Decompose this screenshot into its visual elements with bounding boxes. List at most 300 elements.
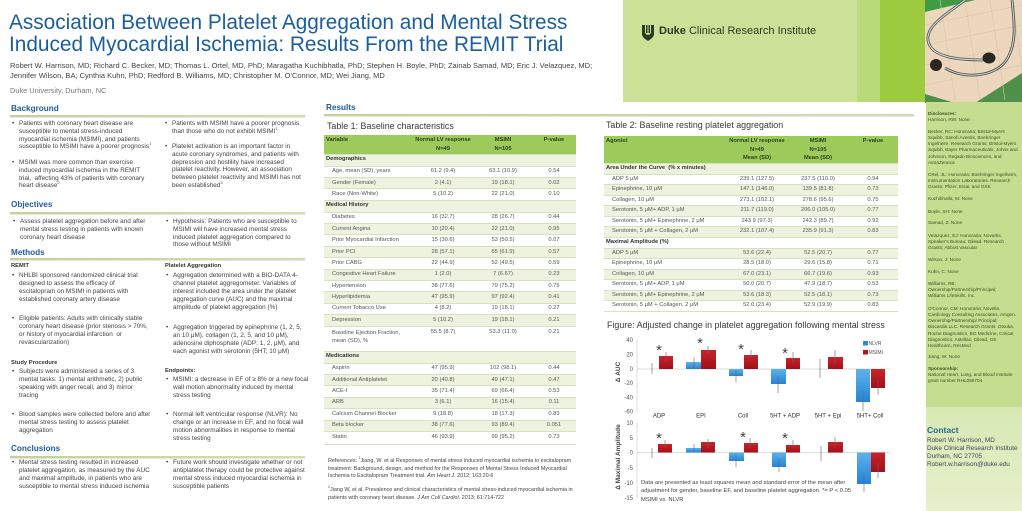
table 2: baseline resting platelet aggregation: Serotonin, 5 μM+ ADP, 1 μM	[612, 207, 685, 213]
table 1: baseline characteristics: Age, mean (SD), years	[332, 168, 390, 174]
table 1: baseline characteristics: 28 (57.1)	[431, 249, 454, 255]
bullet text: susceptible to mental stress-induced	[19, 128, 122, 135]
bullet text: an 10 μM), collagen (1, 2, 5, and 10 μM),	[173, 332, 289, 339]
disclosures text: Williams, RB:	[928, 281, 956, 286]
table 1: baseline characteristics: N=105	[494, 146, 512, 152]
y axis: AUC: 20	[626, 352, 634, 358]
bullet text: Subjects were administered a series of 3	[19, 368, 134, 375]
table 1: baseline characteristics: 0.44	[548, 214, 560, 220]
table 1: baseline characteristics: 102 (98.1)	[490, 365, 516, 371]
bars: MSIMI	[659, 350, 885, 388]
table 1: baseline characteristics: 19 (18.1)	[491, 180, 514, 186]
disclosures text: Becker, RC: Honoraria; Bristol-Myers	[928, 129, 1005, 134]
y axis: maximal amplitude: 5	[630, 436, 634, 442]
table 2: baseline resting platelet aggregation: 52.5 (18.1)	[804, 292, 832, 298]
table 1: baseline characteristics: Baseline Ejection Fraction,	[332, 330, 400, 336]
bullet text: Normal left ventricular response (NLVR): No	[173, 411, 298, 418]
table 1: baseline characteristics: 0.11	[549, 399, 559, 405]
bullet text: adenosine diphosphate (ADP; 1, 2, μM), and	[173, 340, 299, 347]
table 2: baseline resting platelet aggregation: 0.53	[867, 281, 879, 287]
bullet text: revascularization)	[19, 339, 69, 346]
panel: methods	[10, 248, 308, 442]
table 1 title: Table 1: Baseline characteristics	[327, 121, 454, 131]
disclosures text: Jiang, W: None	[928, 354, 960, 359]
table 1: baseline characteristics	[324, 135, 576, 445]
table 2: baseline resting platelet aggregation: 235.9 (91.3)	[802, 228, 834, 234]
table 2: baseline resting platelet aggregation: 0.93	[867, 271, 879, 277]
table 2: baseline resting platelet aggregation: 239.1 (127.5)	[740, 176, 774, 182]
heading: contact: Contact	[927, 425, 959, 435]
table 2: baseline resting platelet aggregation: 0.83	[867, 228, 879, 234]
contact details: Durham, NC 27705	[927, 453, 982, 460]
panel: background	[10, 104, 306, 189]
table 2: baseline resting platelet aggregation: 0.92	[867, 218, 879, 224]
bullet text: speaking with anger recall, and 3) mirror	[19, 384, 133, 391]
heading: methods: Methods	[11, 248, 45, 257]
table 2: baseline resting platelet aggregation: Epinephrine, 10 μM	[612, 260, 662, 266]
table 2: baseline resting platelet aggregation	[604, 136, 898, 312]
bullet text: each agonist with serotonin (5HT; 10 μM)	[173, 348, 289, 355]
legend: NLVR	[868, 341, 882, 347]
references: treatment: Background, design, and method for the Responses of Mental Stress Induced Myocardial	[328, 466, 567, 472]
bullet text: aggregation	[19, 427, 53, 434]
bullet text: antiplatelet therapy could be protective against	[173, 467, 305, 474]
y axis: maximal amplitude: -5	[628, 466, 634, 472]
table 2: baseline resting platelet aggregation: ADP 5 μM	[612, 176, 638, 182]
bullet text: heart disease2	[19, 180, 60, 189]
contact details: Robert W. Harrison, MD	[927, 437, 995, 444]
bullet text: susceptible to MSIMI have a poorer prognosis1	[19, 141, 151, 150]
bullet text: aggregation curve (AUC) and the maximal	[173, 296, 292, 303]
bullet text: platelet aggregation, as measured by the AUC	[19, 467, 150, 474]
bullet text: change or an increase in EF, and no focal wall	[173, 419, 303, 426]
bullet text: induced platelet aggregation compared to	[173, 234, 291, 241]
significance markers	[656, 335, 788, 362]
table 1: baseline characteristics: Aspirin	[332, 365, 350, 371]
text: •	[166, 376, 168, 383]
bullet text: MSIMI: a decrease in EF of ≥ 8% or a new focal	[173, 376, 308, 383]
table 1: baseline characteristics: 38 (77.6)	[431, 422, 454, 428]
bullet text	[166, 272, 298, 311]
subheading: platelet aggregation: Platelet Aggregation	[165, 263, 221, 269]
bullet text: those without MSIMI	[173, 241, 231, 248]
text: •	[166, 459, 168, 466]
table 1: baseline characteristics: 0.95	[548, 226, 560, 232]
table 1: baseline characteristics: 79 (75.2)	[491, 283, 514, 289]
x labels: 5HT + ADP	[770, 414, 800, 420]
disclosures text: Ownership/Partnership/Principal;	[928, 287, 996, 292]
photo: stethoscope on keyboard	[925, 0, 1022, 103]
table 1: baseline characteristics: 1 (2.0)	[435, 271, 451, 277]
table 1: baseline characteristics: Race (Non-White)	[332, 191, 378, 197]
table 2: baseline resting platelet aggregation: N=105	[809, 146, 827, 152]
table 2: baseline resting platelet aggregation: 53.6 (22.4)	[743, 250, 771, 256]
y axis: AUC	[624, 338, 634, 416]
bullet text: and maximal amplitude, in patients who are	[19, 475, 142, 482]
text: •	[12, 120, 14, 127]
table 1: baseline characteristics: Medications	[326, 353, 359, 359]
title: Induced Myocardial Ischemia: Results From the REMIT Trial	[9, 32, 563, 56]
disclosures text: Harrison, RW: None	[928, 117, 970, 122]
bullet text	[166, 324, 302, 355]
significance markers: *	[697, 335, 703, 352]
table 1: baseline characteristics: 97 (92.4)	[491, 294, 514, 300]
table 1: baseline characteristics: Hyperlipidemia	[332, 294, 370, 300]
bullet text: Patients with MSIMI have a poorer prognosis	[172, 120, 299, 127]
references: 2Jiang W, et al. Prevalence and clinical characteristics of mental stress-induced myocardial ischemia in	[328, 485, 573, 493]
table 1: baseline characteristics: 28 (26.7)	[491, 214, 514, 220]
bullet text	[166, 459, 305, 490]
panel: disclosures	[926, 102, 1022, 407]
table 2: baseline resting platelet aggregation: 0.77	[867, 250, 879, 256]
table 1: baseline characteristics: Current Angina	[332, 226, 370, 232]
table 1: baseline characteristics: 16 (15.4)	[491, 399, 514, 405]
table 2: baseline resting platelet aggregation: Epinephrine, 10 μM	[612, 186, 662, 192]
bullet text: mental stress testing to assess platelet	[19, 419, 129, 426]
table 1: baseline characteristics: 0.54	[548, 168, 560, 174]
bullet text: MSIMI was more common than exercise	[19, 159, 133, 166]
table 2: baseline resting platelet aggregation: Serotonin, 5 μM+ Epinephrine, 2 μM	[612, 218, 704, 224]
x labels: ADP	[653, 414, 665, 420]
disclosures text: AstraZeneca	[928, 160, 955, 165]
disclosures text: Instrumentation Laboratories. Research	[928, 178, 1010, 183]
subheading: study procedure: Study Procedure	[11, 360, 57, 366]
y axis: AUC: -60	[624, 410, 634, 416]
chart: adjusted change in platelet aggregation	[615, 335, 890, 502]
table 1: baseline characteristics: Prior CABG	[332, 260, 362, 266]
table 2: baseline resting platelet aggregation: ADP 5 μM	[612, 250, 638, 256]
table 2: baseline resting platelet aggregation: 273.1 (102.1)	[740, 197, 774, 203]
bullet text: Hypothesis: Patients who are susceptible to	[173, 218, 297, 225]
table 2: baseline resting platelet aggregation: Mean (SD)	[743, 155, 771, 161]
bullet text: channel platelet aggregometer. Variables of	[173, 280, 296, 287]
table 1: baseline characteristics: 0.41	[548, 294, 560, 300]
table 2: baseline resting platelet aggregation: 52.5 (20.7)	[804, 250, 832, 256]
table 1: baseline characteristics: 0.10	[548, 191, 560, 197]
significance markers: *	[782, 430, 788, 447]
bullet text	[13, 218, 146, 241]
subheading: endpoints: Endpoints:	[165, 368, 195, 374]
disclosures text: National Heart, Lung, and Blood Institute	[928, 372, 1012, 377]
table 1: baseline characteristics: 0.44	[548, 365, 560, 371]
table 1: baseline characteristics: Current Tobacco Use	[332, 305, 386, 311]
table 2: baseline resting platelet aggregation: 66.7 (19.6)	[804, 271, 832, 277]
bullet text	[166, 376, 308, 399]
bullet text: coronary heart disease	[20, 234, 85, 241]
bullet text	[166, 218, 297, 248]
bullet text: than those who do not exhibit MSIMI1	[172, 126, 278, 135]
table 1: baseline characteristics: 15 (30.6)	[431, 237, 454, 243]
table 1: baseline characteristics: MSIMI	[495, 137, 511, 143]
table 2: baseline resting platelet aggregation: Agonist	[606, 138, 627, 144]
table 1: baseline characteristics: 0.21	[548, 329, 560, 335]
table 2: baseline resting platelet aggregation: MSIMI	[810, 138, 826, 144]
table 2: baseline resting platelet aggregation: Collagen, 10 μM	[612, 197, 654, 203]
table 1: baseline characteristics: 22 (44.9)	[431, 260, 454, 266]
chart note: adjustment for gender, baseline EF, and baseline platelet aggregation. *= P < 0.05	[641, 488, 851, 494]
disclosures text: Kuhn, C: None	[928, 269, 959, 274]
table 1: baseline characteristics: 18 (17.3)	[491, 411, 514, 417]
table 2: baseline resting platelet aggregation: 278.6 (95.6)	[802, 197, 834, 203]
table 1: baseline characteristics: Variable	[326, 137, 348, 143]
table 1: baseline characteristics: 0.051	[547, 422, 561, 428]
bullet text	[12, 411, 150, 434]
bullet text: designed to assess the efficacy of	[19, 280, 115, 287]
table 2: baseline resting platelet aggregation: Serotonin, 5 μM + Collagen, 2 μM	[612, 228, 698, 234]
table 2: baseline resting platelet aggregation: Area Under the Curve (% x minutes)	[606, 164, 706, 170]
table 1: baseline characteristics: 53.3 (11.0)	[489, 329, 517, 335]
bars: MSIMI	[658, 442, 885, 472]
title	[9, 11, 567, 56]
bullet text: stress testing	[173, 392, 211, 399]
logo text: Duke Clinical Research Institute: Duke Clinical Research Institute	[659, 25, 816, 37]
table 1: baseline characteristics: 0.07	[548, 237, 560, 243]
disclosures text: Johnson, Regado Biosciences, and	[928, 154, 1002, 159]
table 2: baseline resting platelet aggregation: 237.5 (110.0)	[801, 176, 835, 182]
table 2: baseline resting platelet aggregation: 242.3 (89.7)	[802, 218, 834, 224]
y axis: AUC: -40	[624, 396, 634, 402]
bullet text: Aggregation triggered by epinephrine (1, 2, 5,	[173, 324, 302, 331]
table 1: baseline characteristics: 0.59	[548, 260, 560, 266]
bullet text: or history of myocardial infarction or	[19, 331, 122, 338]
table 1: baseline characteristics: N=49	[436, 146, 450, 152]
x labels: 5HT+ Coll	[857, 414, 883, 420]
chart note: Data are presented as least squares mean and standard error of the mean after	[641, 480, 845, 486]
table 2: baseline resting platelet aggregation: P-value	[863, 138, 883, 144]
bullet text: susceptible to mental stress induced ischemia	[19, 483, 149, 490]
bars: NLVR	[686, 362, 870, 402]
disclosures text: Kuchibhatla, M: None	[928, 196, 973, 201]
table 2: baseline resting platelet aggregation: 0.73	[867, 186, 879, 192]
disclosures text: Healthcare, ResMed	[928, 343, 971, 348]
bullet text: Aggregation determined with a BIO-DATA 4-	[173, 272, 298, 279]
text: •	[12, 159, 14, 166]
bullet text	[12, 459, 150, 490]
table 2: baseline resting platelet aggregation: 139.5 (81.8)	[802, 186, 834, 192]
table 1: baseline characteristics: 35 (71.4)	[431, 388, 454, 394]
disclosures text: Squibb, Bayer Pharmaceuticals, Johns and	[928, 147, 1018, 152]
disclosures text: Biscardia LLC. Research Grants: Otsuka,	[928, 324, 1014, 329]
bullet text: depression and hostility have increased	[172, 159, 284, 166]
bullet text: myocardial ischemia (MSIMI), and patients	[19, 136, 140, 143]
table 1: baseline characteristics: Demographics	[326, 156, 366, 162]
table 2: baseline resting platelet aggregation: Mean (SD)	[804, 155, 832, 161]
bullet text: Platelet activation is an important factor in	[172, 143, 290, 150]
bullet text: mental tasks: 1) mental arithmetic, 2) public	[19, 376, 142, 383]
significance markers: *	[782, 345, 788, 362]
significance markers: *	[656, 342, 662, 359]
disclosures text: Speaker's Bureau; Gilead. Research	[928, 239, 1004, 244]
x labels	[653, 414, 883, 420]
disclosures text: Ortel, JL: Honoraria; Boehringer Ingelheim,	[928, 172, 1017, 177]
table 1: baseline characteristics: ACE-I	[332, 388, 347, 394]
table 1: baseline characteristics: 49 (47.1)	[491, 377, 514, 383]
bullet text: Patients with coronary heart disease are	[19, 120, 133, 127]
icon: Duke shield logo	[642, 25, 654, 41]
bullet text: Future work should investigate whether or not	[173, 459, 302, 466]
heading: background: Background	[11, 104, 59, 113]
table 1: baseline characteristics: 0.02	[548, 180, 560, 186]
table 1: baseline characteristics: ARB	[332, 399, 344, 405]
disclosures text: grant number RHL085704	[928, 378, 982, 383]
text: •	[12, 315, 14, 322]
bars: NLVR	[686, 448, 871, 484]
table 1: baseline characteristics: 52 (49.5)	[491, 260, 514, 266]
table 1: baseline characteristics: 61.2 (9.4)	[431, 168, 455, 174]
contact details: Robert.w.harrison@duke.edu	[927, 461, 1010, 468]
text: •	[166, 272, 168, 279]
y axis: maximal amplitude: -15	[624, 496, 634, 502]
text: •	[12, 459, 14, 466]
table 1: baseline characteristics: 19 (18.1)	[491, 305, 514, 311]
table 1: baseline characteristics: mean (SD), %	[332, 338, 368, 344]
bullet text: coronary heart disease (prior stenosis > 70%,	[19, 323, 148, 330]
references	[328, 456, 573, 500]
bullet text: susceptible patients	[173, 483, 229, 490]
table 2: baseline resting platelet aggregation: 0.75	[867, 197, 879, 203]
table 1: baseline characteristics: 0.75	[548, 283, 560, 289]
significance markers: *	[656, 430, 662, 447]
significance markers: *	[740, 429, 746, 446]
bullet text	[12, 315, 148, 346]
table 1: baseline characteristics: Congestive Heart Failure	[332, 271, 396, 277]
table 2: baseline resting platelet aggregation: 67.0 (23.1)	[743, 271, 771, 277]
references: References: 1Jiang, W. et al Responses of mental stress induced myocardial ischemia to escitalopram	[328, 456, 571, 464]
disclosures text: Disclosures:	[928, 111, 956, 116]
disclosures text: Samad, Z: None	[928, 220, 962, 225]
table 1: baseline characteristics: 0.21	[548, 317, 560, 323]
table 1: baseline characteristics: 99 (95.2)	[491, 434, 514, 440]
table 1: baseline characteristics: 38 (77.6)	[431, 283, 454, 289]
bullet text: between platelet reactivity and MSIMI has not	[172, 174, 301, 181]
contact details: Duke Clinical Research Institute	[927, 445, 1018, 452]
table 1: baseline characteristics: Statin	[332, 434, 347, 440]
table 1: baseline characteristics: Hypertension	[332, 283, 366, 289]
disclosures text: O'Connor, CM: Honoraria; Novella.	[928, 306, 1000, 311]
table 1: baseline characteristics: 5 (10.2)	[433, 317, 453, 323]
text: •	[13, 218, 15, 225]
table 1: baseline characteristics: 0.57	[548, 249, 560, 255]
chart note: MSIMI vs. NLVR	[641, 497, 683, 503]
text: •	[166, 218, 168, 225]
heading: conclusions: Conclusions	[11, 444, 60, 453]
table 1: baseline characteristics: 0.73	[548, 434, 560, 440]
table 2: baseline resting platelet aggregation: 0.73	[867, 292, 879, 298]
heading: objectives: Objectives	[11, 200, 52, 209]
bullet text	[12, 272, 138, 303]
table 2: baseline resting platelet aggregation: Maximal Amplitude (%)	[606, 238, 669, 244]
table 1: baseline characteristics: Prior Myocardial Infarction	[332, 237, 399, 243]
table 1: baseline characteristics: 5 (10.2)	[433, 191, 453, 197]
significance markers: *	[738, 341, 744, 358]
chart: delta AUC panel	[615, 335, 890, 420]
bullet text	[166, 411, 303, 442]
table 1: baseline characteristics: 63.1 (10.9)	[489, 168, 517, 174]
bullet text	[12, 159, 144, 189]
bullet text: been established3	[172, 180, 223, 189]
error bars	[652, 346, 878, 411]
bullet text: Mental stress testing resulted in increased	[19, 459, 138, 466]
table 1: baseline characteristics: Depression	[332, 317, 361, 323]
disclosures text: Grants; Pfizer, Eisai, and GSK	[928, 184, 991, 189]
disclosures text: Sponsorship:	[928, 366, 958, 371]
table 2: baseline resting platelet aggregation: 0.83	[867, 302, 879, 308]
table 1: baseline characteristics: 22 (21.0)	[491, 191, 514, 197]
disclosures text: Wilson, J: None	[928, 257, 961, 262]
header band	[623, 0, 1022, 102]
band: bright green	[880, 0, 925, 102]
panel: objectives	[10, 200, 306, 248]
y axis: maximal amplitude: 0	[630, 450, 634, 456]
title: Association Between Platelet Aggregation and Mental Stress	[9, 11, 567, 34]
significance markers	[656, 429, 788, 447]
table 2: baseline resting platelet aggregation: 0.71	[867, 260, 879, 266]
table 2: baseline resting platelet aggregation: 50.0 (20.7)	[743, 281, 771, 287]
bullet text: Blood samples were collected before and after	[19, 411, 150, 418]
table 1: baseline characteristics: 69 (66.4)	[491, 388, 514, 394]
table 1: baseline characteristics: 93 (89.4)	[491, 422, 514, 428]
table 1: baseline characteristics: Calcium Channel Blocker	[332, 411, 397, 417]
x labels: 5HT + Epi	[815, 414, 841, 420]
references: patients with coronary heart disease. J Am Coll Cardiol. 2013; 61:714-722	[328, 494, 504, 500]
figure title: Figure: Adjusted change in platelet aggregation following mental stress	[607, 320, 885, 330]
bullet text: MSIMI will have increased mental stress	[173, 226, 287, 233]
bullet text: escitalopram on MSIMI in patients with	[19, 288, 128, 295]
bullet text: mental stress testing in patients with known	[20, 226, 143, 233]
legend: MSIMI	[868, 350, 883, 356]
table 1: baseline characteristics: 7 (6.67)	[493, 271, 513, 277]
bullet text: induced myocardial ischemia in the REMIT	[19, 167, 140, 174]
table 2: baseline resting platelet aggregation: 52.0 (23.4)	[743, 302, 771, 308]
bullet text: acute coronary syndromes, and patients with	[172, 151, 299, 158]
legend	[863, 341, 883, 356]
table 1: baseline characteristics: 53 (50.5)	[491, 237, 514, 243]
table 2: baseline resting platelet aggregation: 232.1 (107.4)	[740, 228, 774, 234]
heading: results: Results	[326, 103, 356, 112]
table 2: baseline resting platelet aggregation: Serotonin, 5 μM+ Epinephrine, 2 μM	[612, 292, 704, 298]
table 1: baseline characteristics: 10 (20.4)	[431, 226, 454, 232]
table 1: baseline characteristics: 0.53	[548, 388, 560, 394]
bullet text	[12, 120, 151, 150]
table 2: baseline resting platelet aggregation: Collagen, 10 μM	[612, 271, 654, 277]
table 1: baseline characteristics: 4 (8.2)	[435, 305, 451, 311]
table 1: baseline characteristics: 19 (18.1)	[491, 317, 514, 323]
table 1: baseline characteristics: 16 (32.7)	[431, 214, 454, 220]
bullet text	[165, 120, 299, 135]
table 1: baseline characteristics: 2 (4.1)	[435, 180, 451, 186]
bullet text: stress testing	[173, 435, 211, 442]
table 1: baseline characteristics: 9 (18.8)	[433, 411, 453, 417]
text: •	[166, 411, 168, 418]
table 1: baseline characteristics: 20 (40.8)	[431, 377, 454, 383]
affiliation: Duke University, Durham, NC	[10, 86, 106, 95]
text: •	[165, 143, 167, 150]
text: •	[12, 411, 14, 418]
table 1: baseline characteristics: Gender (Female)	[332, 180, 376, 186]
subheading: REMIT: REMIT	[11, 263, 29, 269]
bullet text	[12, 368, 142, 399]
table 2: baseline resting platelet aggregation: 47.9 (18.7)	[804, 281, 832, 287]
y axis: maximal amplitude: -10	[624, 481, 634, 487]
table 1: baseline characteristics: Diabetes	[332, 214, 355, 220]
table 2: baseline resting platelet aggregation: 206.0 (105.0)	[801, 207, 835, 213]
y axis title: maximal amplitude: Δ Maximal Amplitude	[615, 424, 622, 490]
table 2: baseline resting platelet aggregation: 28.5 (18.0)	[743, 260, 771, 266]
table 1: baseline characteristics: 3 (6.1)	[435, 399, 451, 405]
table 2: baseline resting platelet aggregation: N=49	[750, 146, 764, 152]
contact details	[927, 437, 1018, 468]
disclosures text	[928, 111, 1018, 383]
